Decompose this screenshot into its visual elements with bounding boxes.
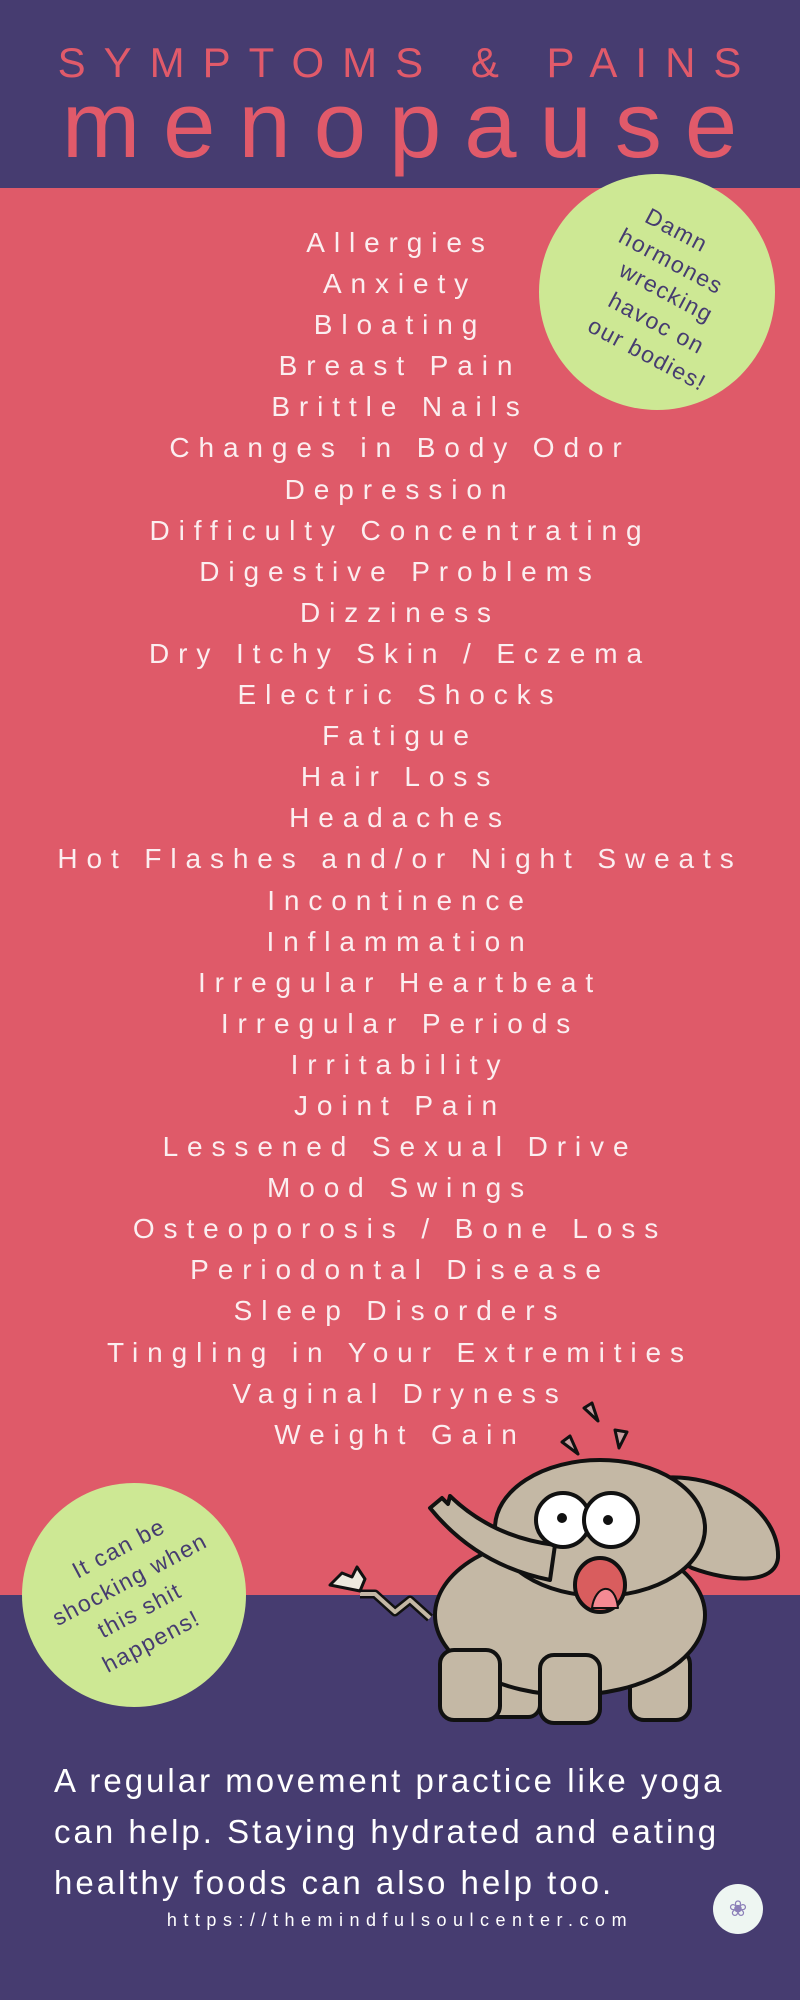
symptom list: Anxiety [323,268,477,299]
symptom list: Weight Gain [274,1419,526,1450]
symptom list: Hair Loss [301,761,499,792]
symptom list: Osteoporosis / Bone Loss [133,1213,667,1244]
callout: damn hormones: hormones [615,222,728,299]
url: https://themindfulsoulcenter.com [167,1910,633,1930]
text block: advice: A regular movement practice like yoga [54,1762,724,1799]
text block: advice: healthy foods can also help too. [54,1864,614,1901]
symptom list: Bloating [314,309,486,340]
callout: damn hormones: wrecking [615,256,718,327]
symptom list: Irritability [291,1049,509,1080]
symptom list: Depression [285,474,515,505]
title: menopause: menopause [62,72,760,177]
symptom list: Difficulty Concentrating [150,515,650,546]
text block: advice [54,1762,724,1901]
icon: lotus logo: ❀ [729,1896,747,1921]
symptom list: Tingling in Your Extremities [107,1337,693,1368]
symptom list: Periodontal Disease [190,1254,610,1285]
symptom list: Sleep Disorders [234,1295,566,1326]
callout: damn hormones: havoc on [605,286,710,359]
callout: damn hormones [539,174,775,410]
symptom list: Joint Pain [294,1090,506,1121]
callout: damn hormones: our bodies! [584,311,711,396]
symptom list: Electric Shocks [238,679,562,710]
callout: shocking: this shit [93,1577,186,1643]
symptom list: Inflammation [266,926,534,957]
symptom list: Dry Itchy Skin / Eczema [149,638,651,669]
symptom list: Headaches [289,802,511,833]
callout: shocking: It can be [68,1513,170,1583]
symptom list: Mood Swings [267,1172,533,1203]
symptom list: Changes in Body Odor [169,432,631,463]
title: symptoms & pains: SYMPTOMS & PAINS [58,39,759,86]
callout: shocking: shocking when [48,1527,212,1631]
symptom list: Digestive Problems [199,556,601,587]
symptom list: Allergies [306,227,494,258]
icon: elephant [328,1401,780,1725]
callout: shocking: happens! [98,1605,204,1678]
panel: pink symptoms area [0,188,800,1595]
symptom list: Breast Pain [279,350,521,381]
symptom list: Fatigue [322,720,478,751]
symptom list: Irregular Periods [221,1008,579,1039]
header band [0,0,800,188]
symptom list: Lessened Sexual Drive [163,1131,637,1162]
symptom list: Incontinence [267,884,533,916]
symptom list [57,227,743,1450]
symptom list: Vaginal Dryness [232,1378,568,1409]
symptom list: Irregular Heartbeat [198,967,602,998]
symptom list: Dizziness [300,597,500,628]
text block: advice: can help. Staying hydrated and eating [54,1813,719,1850]
icon: lotus logo [713,1884,763,1934]
symptom list: Brittle Nails [271,391,529,422]
callout: shocking [22,1483,246,1707]
symptom list: Hot Flashes and/or Night Sweats [57,843,743,874]
callout: damn hormones: Damn [641,202,713,257]
